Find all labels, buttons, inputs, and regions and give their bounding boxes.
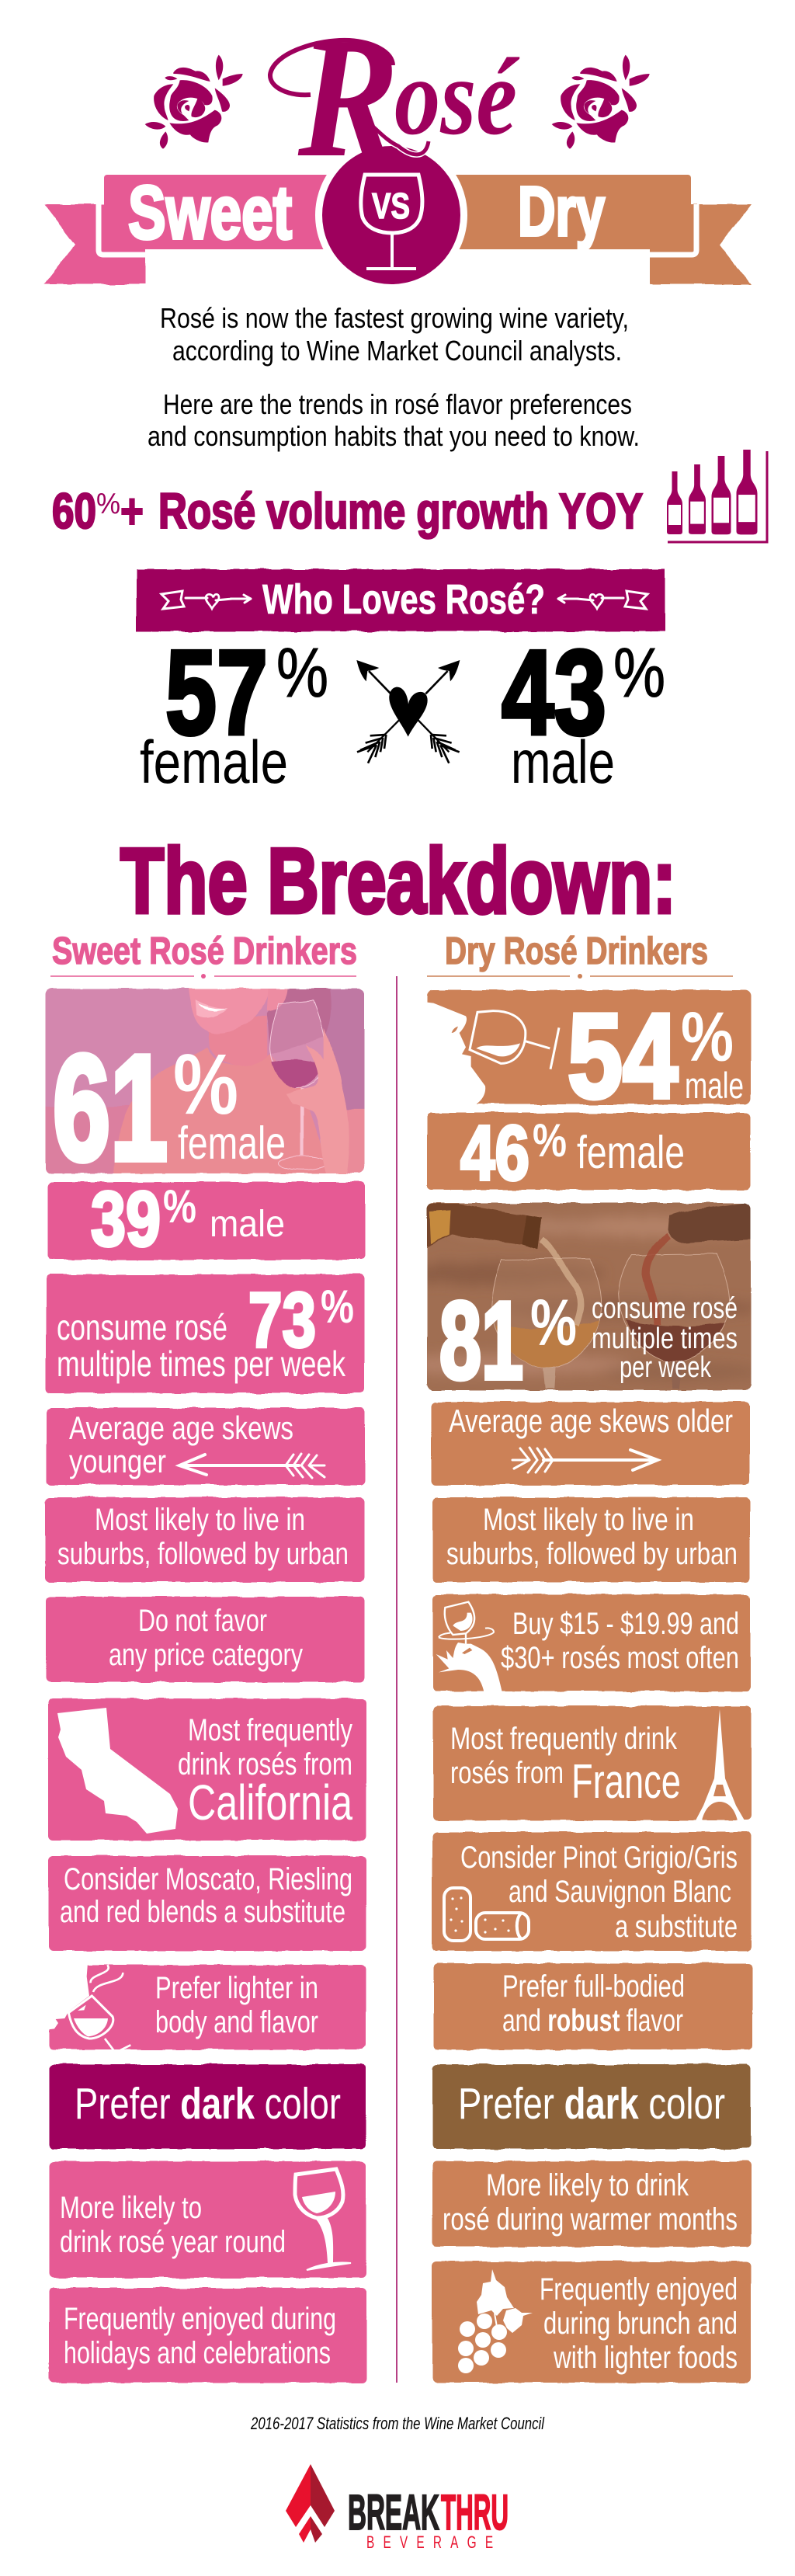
panel: consider sweet <box>49 1856 366 1951</box>
intro text: and consumption habits that you need to know. <box>148 420 640 452</box>
vs label: VS <box>372 186 410 226</box>
icon: rose right <box>552 55 650 149</box>
panel: suburbs dry <box>432 1497 751 1582</box>
panel: 39% male: 39 <box>91 1176 161 1263</box>
icon: hand swirling glass <box>436 1602 502 1691</box>
panel: consider sweet: Consider Moscato, Riesling <box>64 1862 352 1896</box>
panel: 46% female: female <box>577 1127 685 1178</box>
panel: 54% male <box>423 989 751 1123</box>
panel: 81% consume: consume rosé <box>592 1292 738 1325</box>
stat: 43% male: male <box>511 728 615 796</box>
panel: price sweet <box>47 1597 364 1682</box>
panel: year round <box>49 2161 366 2278</box>
panel: 81% consume: % <box>530 1286 577 1359</box>
ribbon: dry <box>446 173 751 284</box>
panel: california: Most frequently <box>188 1713 352 1747</box>
panel: 61% female <box>44 988 367 1191</box>
panel: suburbs sweet: Most likely to live in <box>95 1503 305 1537</box>
icon: rose left <box>145 55 243 149</box>
title: Rosé <box>270 2 519 193</box>
heading: dry rosé drinkers: Dry Rosé Drinkers <box>445 930 708 972</box>
panel: brunch <box>432 2261 751 2383</box>
panel: france: Most frequently drink <box>450 1722 678 1756</box>
panel: dark color dry: Prefer dark color <box>458 2079 725 2129</box>
panel: 39% male: % <box>163 1180 196 1232</box>
stat: 43% male: 43 <box>502 625 606 760</box>
photo: wine poured into glasses <box>427 1202 752 1391</box>
stat: volume growth: + <box>120 483 144 539</box>
panel: 73% consume: % <box>321 1281 354 1333</box>
panel: price sweet: Do not favor <box>138 1604 267 1638</box>
stat: 43% male: % <box>613 634 665 712</box>
panel: average age younger: Average age skews <box>69 1410 293 1446</box>
logo: breakthru beverage: BREAK <box>348 2484 439 2540</box>
icon: face sipping wine <box>423 1002 559 1108</box>
panel: 81% consume <box>427 1202 752 1391</box>
panel: average age older <box>432 1402 749 1485</box>
panel: 73% consume: 73 <box>248 1277 316 1364</box>
banner: who loves rosé <box>137 569 665 631</box>
panel: warmer months: More likely to drink <box>486 2168 689 2202</box>
stat: 57% female: 57 <box>165 625 268 760</box>
banner heading: Who Loves Rosé? <box>262 576 545 623</box>
stat: volume growth: 60 <box>52 483 96 539</box>
ribbon: sweet <box>44 170 337 284</box>
panel: dark color sweet: Prefer dark color <box>75 2079 341 2129</box>
icon: california map <box>57 1708 178 1834</box>
icon: eiffel tower <box>696 1709 745 1820</box>
panel: consider dry: and Sauvignon Blanc <box>509 1875 731 1909</box>
panel: 39% male <box>47 1176 365 1263</box>
intro text: Rosé is now the fastest growing wine variety, <box>160 302 629 334</box>
stat: 57% female <box>140 625 328 796</box>
panel: full bodied: and robust flavor <box>502 2004 683 2038</box>
figure: 61%: 61 <box>53 1024 168 1191</box>
stat: 57% female: % <box>276 634 328 712</box>
panel: 81% consume: multiple times <box>592 1323 738 1355</box>
panel: california <box>49 1698 366 1841</box>
panel: 54% male: % <box>681 999 734 1076</box>
figure: 54%: 54 <box>568 989 678 1123</box>
panel: france: France <box>571 1755 681 1809</box>
panel: 73% consume: consume rosé <box>57 1307 227 1347</box>
panel: average age younger: younger <box>69 1443 166 1479</box>
ribbon label: Sweet: Sweet <box>128 170 292 255</box>
panel: holidays: Frequently enjoyed during <box>64 2302 336 2336</box>
icon: wine glass <box>295 2169 351 2270</box>
panel: california: California <box>188 1775 352 1830</box>
panel: full bodied <box>434 1963 752 2049</box>
panel: 46% female: 46 <box>460 1110 529 1197</box>
panel: lighter body <box>41 1959 366 2052</box>
heading: sweet rosé drinkers: Sweet Rosé Drinkers <box>52 930 357 972</box>
panel: suburbs dry: Most likely to live in <box>483 1503 694 1537</box>
panel: 61% female: % <box>173 1037 238 1132</box>
source note: 2016-2017 Statistics from the Wine Market Council <box>250 2414 545 2433</box>
panel: 73% consume <box>46 1274 364 1393</box>
badge: vs wine glass <box>315 139 467 291</box>
panel: full bodied: Prefer full-bodied <box>502 1969 685 2004</box>
panel: dark color sweet <box>49 2064 366 2149</box>
panel: price dry <box>432 1594 751 1691</box>
panel: suburbs sweet <box>46 1497 364 1582</box>
intro text <box>148 302 640 452</box>
panel: consider dry <box>432 1832 751 1951</box>
panel: consider sweet: and red blends a substitute <box>60 1895 345 1929</box>
panel: 73% consume: multiple times per week <box>57 1344 346 1384</box>
stat: volume growth <box>52 483 643 539</box>
panel: 54% male: male <box>685 1065 744 1106</box>
icon: arrow left <box>179 1454 325 1478</box>
icon: growing wine bottles <box>667 450 767 542</box>
panel: france: rosés from <box>450 1756 564 1790</box>
panel: 39% male: male <box>210 1204 285 1245</box>
photo: woman with rosé glass <box>44 988 367 1177</box>
panel: california: drink rosés from <box>178 1747 352 1782</box>
intro text: Here are the trends in rosé flavor preferences <box>163 388 632 420</box>
text: THRU <box>441 2484 509 2540</box>
panel: warmer months <box>432 2161 751 2247</box>
panel: 81% consume: per week <box>620 1351 712 1384</box>
panel: brunch: during brunch and <box>543 2307 738 2341</box>
title: Rosé: osé <box>394 35 519 158</box>
stat: 43% male <box>502 625 665 796</box>
panel: price sweet: any price category <box>109 1638 303 1672</box>
ribbon label: Dry: Dry <box>518 173 605 251</box>
panel: year round: More likely to <box>60 2191 202 2225</box>
panel: 46% female: % <box>533 1114 567 1166</box>
icon: logo chevron <box>286 2464 335 2543</box>
panel: lighter body: body and flavor <box>155 2005 318 2039</box>
panel: average age younger <box>47 1408 365 1485</box>
icon: corks <box>444 1888 529 1941</box>
icon: banner arrow left <box>161 591 251 609</box>
panel: lighter body: Prefer lighter in <box>155 1971 318 2005</box>
panel: france <box>432 1706 751 1820</box>
panel: holidays: holidays and celebrations <box>64 2336 331 2370</box>
stat: volume growth: % <box>96 488 120 520</box>
title: Rosé: R <box>297 2 399 193</box>
icon: crossed arrows and heart <box>356 660 460 763</box>
stat: volume growth: Rosé volume growth YOY <box>158 483 643 539</box>
icon: banner arrow right <box>558 591 647 609</box>
logo: breakthru beverage: BEVERAGE <box>366 2533 493 2553</box>
icon: nose sniffing glass <box>41 1959 130 2052</box>
panel: year round: drink rosé year round <box>60 2225 286 2259</box>
panel: consider dry: a substitute <box>615 1910 738 1944</box>
panel: brunch: with lighter foods <box>553 2341 738 2375</box>
intro text: according to Wine Market Council analysts. <box>172 335 622 367</box>
stat: 57% female: female <box>140 728 288 796</box>
panel: dark color dry <box>432 2064 751 2149</box>
icon: arrow right <box>512 1448 658 1472</box>
panel: holidays <box>49 2288 366 2383</box>
panel: suburbs sweet: suburbs, followed by urban <box>57 1537 349 1571</box>
logo: breakthru beverage <box>286 2464 509 2553</box>
panel: 61% female: female <box>178 1118 286 1169</box>
icon: grapes and leaves <box>458 2269 533 2373</box>
figure: 81%: 81 <box>439 1279 523 1403</box>
panel: 46% female <box>427 1110 751 1197</box>
